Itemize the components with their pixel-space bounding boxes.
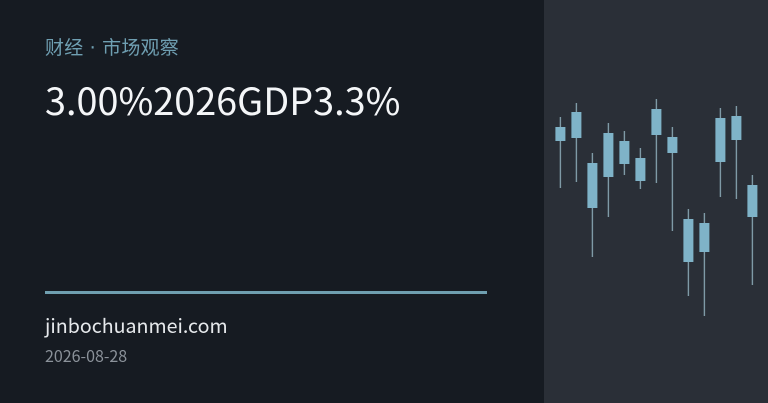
candlesticks bbox=[555, 99, 757, 316]
accent line bbox=[45, 291, 487, 294]
right panel: candlestick chart bbox=[544, 0, 768, 403]
headline: 3.00%2026GDP3.3% bbox=[45, 71, 400, 126]
date: 2026-08-28 bbox=[45, 343, 127, 367]
website: jinbochuanmei.com bbox=[45, 310, 228, 339]
category label: 财经 · 市场观察 bbox=[45, 33, 179, 60]
left panel bbox=[0, 0, 544, 403]
